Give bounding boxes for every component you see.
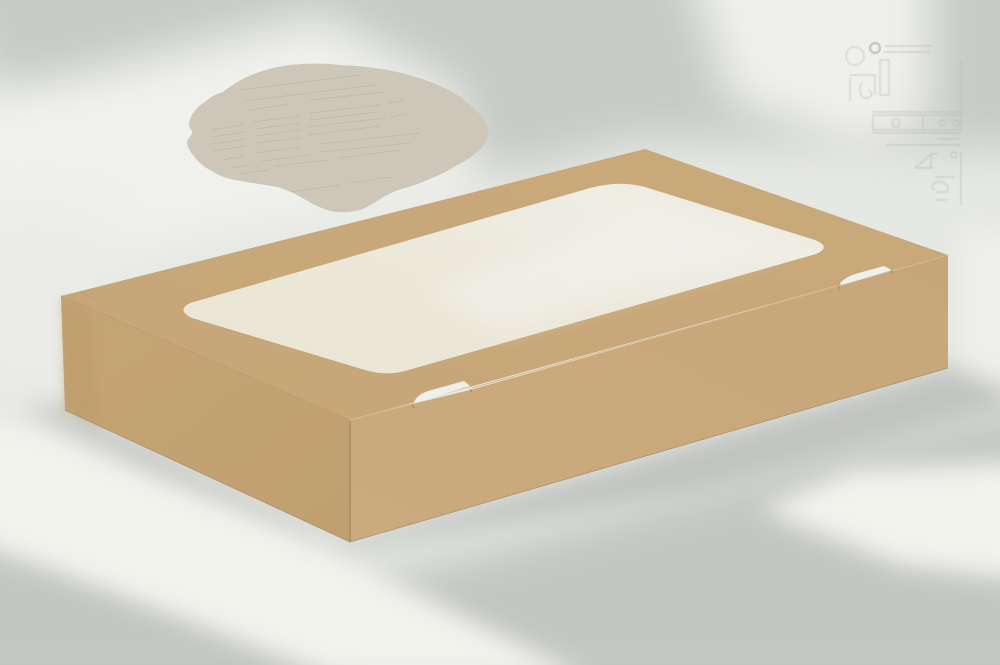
drawing heading with circled number	[870, 43, 932, 53]
white tab: front	[414, 381, 470, 403]
white tab: back	[840, 266, 892, 285]
floating label: cloud-shaped paper	[187, 64, 488, 212]
drawing: long rule lines	[873, 60, 961, 116]
soft shading on box left face	[61, 296, 100, 428]
drawing: assembly diagram	[850, 60, 889, 102]
drawing: lower sketch	[915, 152, 961, 206]
box front long face	[350, 255, 948, 542]
drawing: circular detail	[846, 47, 864, 65]
box cast shadow	[20, 365, 1000, 550]
box window	[183, 184, 824, 373]
kraft box	[61, 149, 948, 542]
box left side face	[61, 296, 350, 542]
faint technical drawing, top right	[846, 43, 961, 206]
drawing: section strip	[873, 115, 961, 130]
label fine print	[212, 75, 420, 192]
flap slit marks	[412, 270, 893, 408]
window inner glow	[430, 210, 770, 330]
box top face	[61, 149, 948, 420]
box edges	[61, 255, 948, 542]
